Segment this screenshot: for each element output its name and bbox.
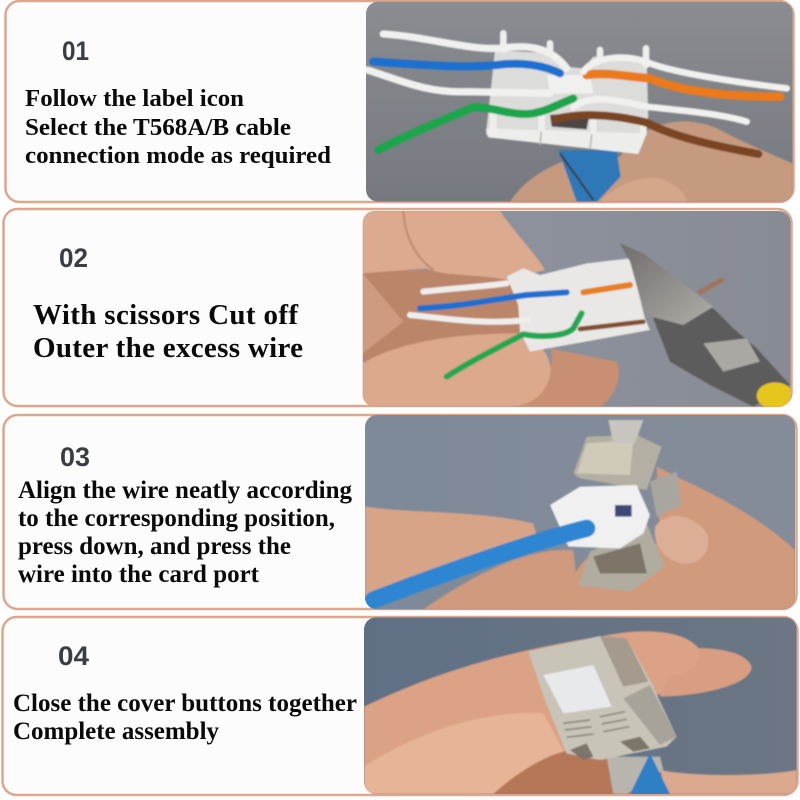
step 3 instructions	[18, 477, 352, 588]
photo: cutting excess wire with pliers	[363, 211, 793, 409]
step 2 instructions	[33, 299, 303, 364]
panel: step 4	[2, 617, 798, 795]
step 1 instructions	[25, 86, 332, 169]
step 3 instructions: to the corresponding position,	[18, 505, 335, 532]
step 2 instructions: Outer the excess wire	[33, 332, 303, 364]
panel: step 1	[6, 1, 794, 202]
step 1 instructions: Follow the label icon	[25, 86, 244, 112]
step 3 instructions: wire into the card port	[18, 561, 260, 588]
step number 02: 02	[59, 243, 88, 273]
photo: wires seated in white module	[366, 2, 793, 202]
step 4 instructions	[13, 690, 357, 745]
photo: pressing wire into keystone jack	[365, 415, 795, 609]
panel: step 3	[4, 415, 796, 609]
step number 01: 01	[62, 36, 89, 66]
step 3 instructions: press down, and press the	[18, 533, 291, 560]
step number 03: 03	[60, 442, 90, 472]
step 1 instructions: connection mode as required	[25, 143, 332, 169]
panel: step 2	[4, 209, 793, 409]
step 4 instructions: Complete assembly	[13, 718, 219, 745]
step 3 instructions: Align the wire neatly according	[18, 477, 352, 504]
step 1 instructions: Select the T568A/B cable	[25, 115, 291, 141]
photo: closed shielded module in hand	[364, 617, 797, 794]
step 2 instructions: With scissors Cut off	[33, 299, 298, 331]
step number 04: 04	[58, 641, 89, 671]
step 4 instructions: Close the cover buttons together	[13, 690, 357, 717]
